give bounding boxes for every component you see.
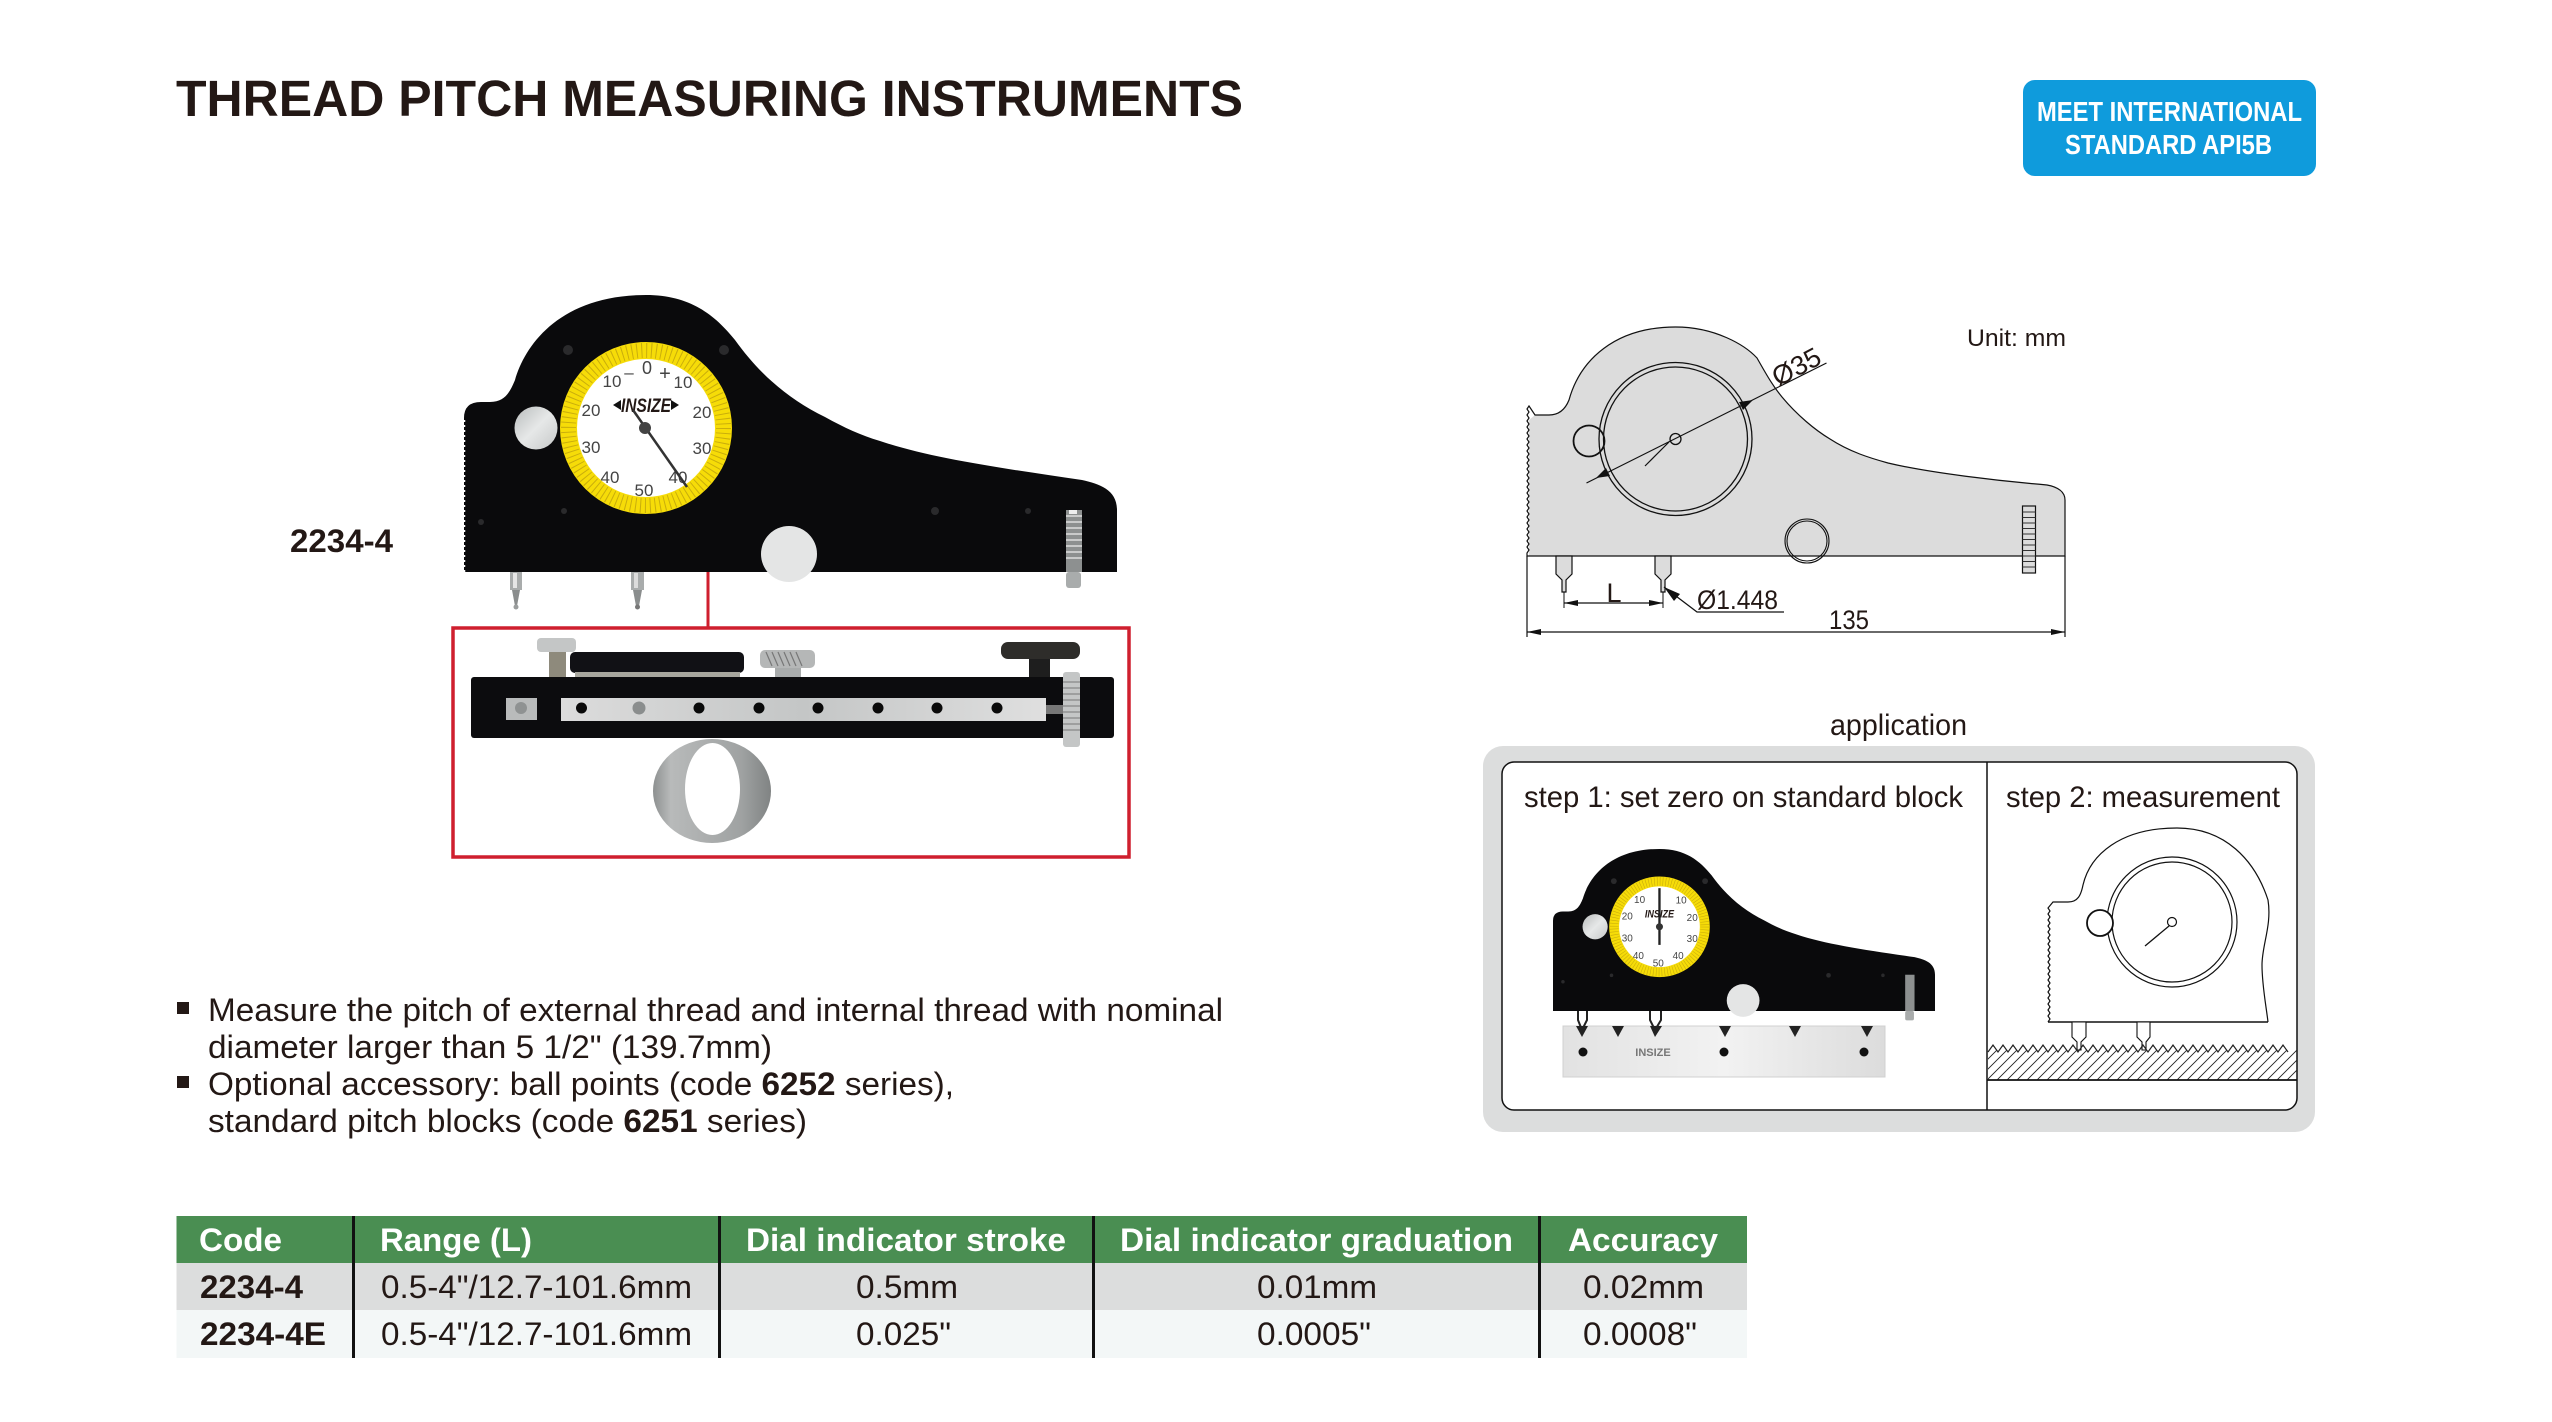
left knob [514, 406, 558, 450]
step 2 label: step 2: measurement [2006, 781, 2281, 814]
header labels: Code [199, 1222, 282, 1258]
photo: gauge on block: 40 [1633, 951, 1644, 962]
model label: 2234-4 [290, 523, 393, 559]
row 1 values: 0.5mm [856, 1269, 958, 1305]
row 1 values [200, 1269, 1704, 1305]
row 2 values: 0.025" [856, 1316, 951, 1352]
dial indicator: 10 [603, 372, 621, 391]
dial indicator: 50 [635, 481, 653, 500]
photo: gauge on block [1553, 849, 1935, 1020]
row 2 values [200, 1316, 1697, 1352]
bullet text 2: Optional accessory: ball points (code 6252 series), [208, 1066, 954, 1102]
dial indicator: 20 [582, 401, 600, 420]
bullet text 2 continued: standard pitch blocks (code 6251 series) [208, 1103, 807, 1139]
row 2 values: 0.5-4"/12.7-101.6mm [381, 1316, 692, 1352]
dial indicator: 20 [693, 403, 711, 422]
instrument body [464, 295, 1117, 572]
photo: gauge on block: INSIZE [1645, 908, 1675, 920]
side wheel [1063, 672, 1080, 747]
badge: meet international standard [2023, 80, 2316, 176]
callout connector [706, 572, 710, 627]
callout: back view box [453, 628, 1129, 857]
bullet text 1 continued: diameter larger than 5 1/2" (139.7mm) [208, 1029, 772, 1065]
lower knob [761, 526, 817, 582]
L dimension: L [1606, 578, 1622, 608]
badge: meet international standard: MEET INTERNATIONAL [2037, 96, 2302, 127]
diameter 35 dimension [1586, 342, 1826, 483]
row 2 values: 0.0008" [1583, 1316, 1697, 1352]
dial indicator: 30 [582, 438, 600, 457]
bullet 1 [177, 1002, 189, 1014]
photo: gauge on block: 40 [1673, 951, 1684, 962]
pins [1556, 556, 1671, 592]
badge: meet international standard: STANDARD API5B [2065, 129, 2272, 160]
dial indicator: – [624, 363, 634, 382]
dial logo: INSIZE [621, 396, 672, 417]
technical drawing [1527, 327, 2065, 637]
dial indicator: 30 [693, 439, 711, 458]
photo: gauge on block: 10 [1634, 895, 1646, 906]
L dimension [1564, 578, 1663, 608]
standard pitch block [1563, 1026, 1885, 1077]
body screws [478, 345, 1031, 525]
header labels [199, 1222, 1718, 1258]
specification table [176, 1216, 1747, 1358]
left and lower knob outlines [1574, 426, 1829, 563]
header labels: Dial indicator graduation [1120, 1222, 1513, 1258]
ball diameter callout: Ø1.448 [1697, 585, 1778, 615]
photo: gauge on block: 20 [1687, 913, 1698, 924]
steel strip with holes [506, 698, 1064, 721]
drawing outline with serrated edge [1527, 327, 2065, 556]
block probe tips [1578, 1011, 1661, 1030]
row 2 values: 2234-4E [200, 1316, 326, 1352]
ring [653, 739, 771, 843]
diameter 35 dimension: Ø35 [1767, 342, 1826, 392]
overall length dimension: 135 [1829, 605, 1869, 635]
probe pins [510, 572, 644, 610]
thumb wheel [1066, 510, 1082, 588]
column dividers [352, 1216, 1541, 1358]
photo: gauge on block: 30 [1622, 933, 1633, 944]
dial indicator: 40 [669, 468, 687, 487]
header labels: Range (L) [380, 1222, 532, 1258]
title: THREAD PITCH MEASURING INSTRUMENTS [176, 70, 1243, 127]
photo: gauge on block: 20 [1622, 912, 1633, 923]
line drawing: gauge on thread [2048, 828, 2269, 1050]
photo: gauge on block: 30 [1687, 934, 1698, 945]
feature list [177, 992, 1223, 1139]
dial indicator: 40 [601, 468, 619, 487]
table header band [176, 1216, 1747, 1263]
row 1 values: 0.02mm [1583, 1269, 1704, 1305]
photo: thread pitch gauge front [464, 295, 1117, 610]
bullet 2 [177, 1076, 189, 1088]
top knobs [537, 638, 1080, 679]
step 1 label: step 1: set zero on standard block [1524, 781, 1964, 814]
header labels: Dial indicator stroke [746, 1222, 1066, 1258]
row 1 values: 0.01mm [1257, 1269, 1377, 1305]
photo: gauge on block: 10 [1676, 895, 1687, 906]
row 1 values: 0.5-4"/12.7-101.6mm [381, 1269, 692, 1305]
black bar [471, 677, 1114, 738]
header labels: Accuracy [1568, 1222, 1718, 1258]
unit note: Unit: mm [1967, 325, 2066, 352]
row 1 values: 2234-4 [200, 1269, 303, 1305]
overall length dimension [1527, 556, 2065, 637]
drawing body [1529, 327, 2065, 556]
dial indicator [560, 342, 732, 514]
dial outline [1599, 362, 1752, 516]
table row 2 band [176, 1310, 1747, 1358]
dial indicator: 0 [642, 358, 652, 378]
table row 1 band [176, 1263, 1747, 1310]
knurled wheel [2022, 506, 2036, 573]
photo: gauge on block: 50 [1653, 959, 1664, 970]
panel: application steps [1483, 746, 2315, 1132]
dial indicator: 10 [674, 373, 692, 392]
threaded workpiece [1987, 1045, 2298, 1080]
row 2 values: 0.0005" [1257, 1316, 1371, 1352]
bullet text 1: Measure the pitch of external thread and internal thread with nominal [208, 992, 1223, 1028]
dial indicator: + [659, 363, 671, 385]
application heading: application [1830, 709, 1967, 742]
standard pitch block: INSIZE [1635, 1047, 1671, 1059]
